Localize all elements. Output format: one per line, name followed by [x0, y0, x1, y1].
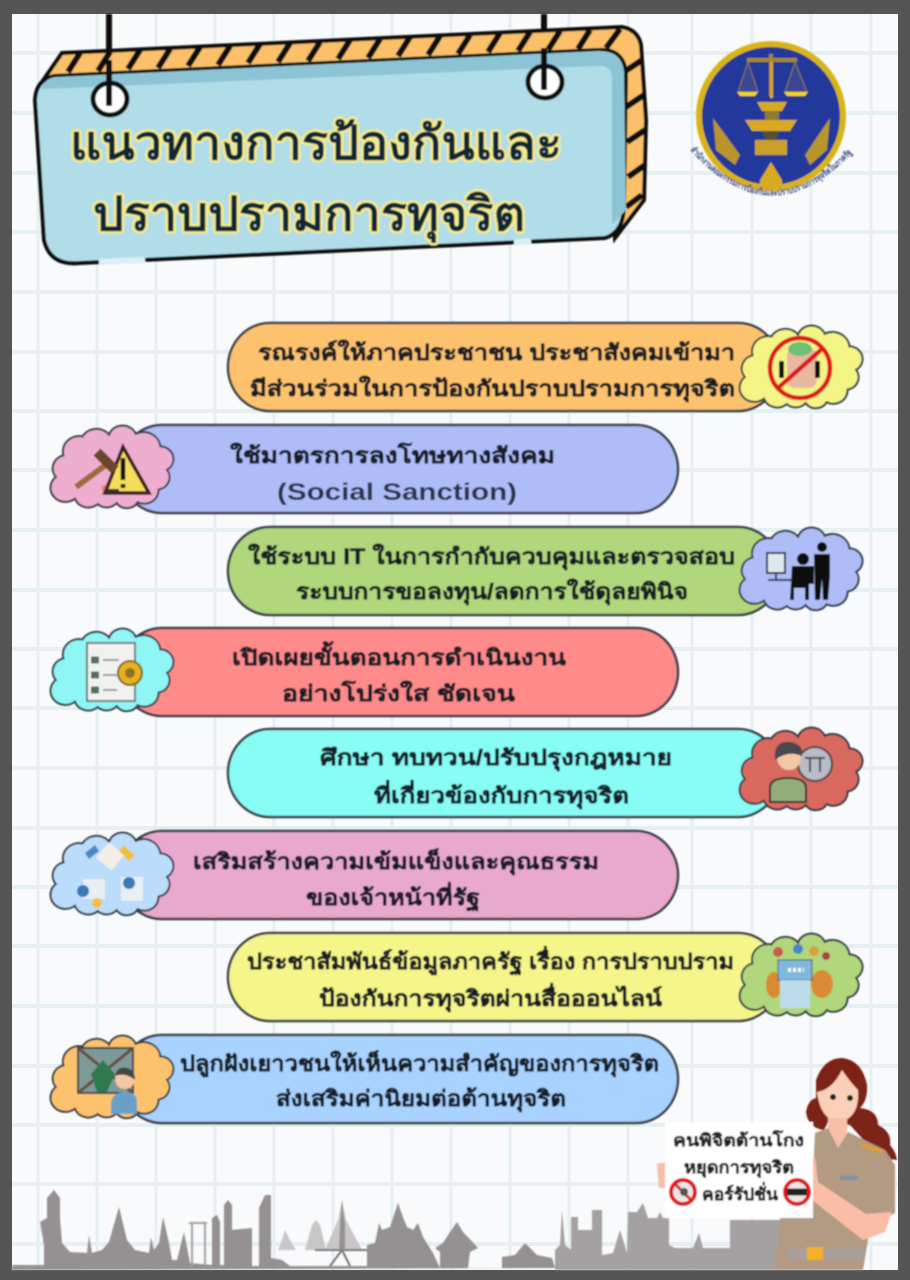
pill: [120, 831, 678, 919]
sign face: [35, 50, 626, 263]
item 2: social sanction: (Social Sanction): [277, 479, 517, 506]
face: [817, 1070, 858, 1123]
neck: [828, 1118, 847, 1148]
anti-corruption placard: คอร์รัปชั่น: [702, 1182, 778, 1204]
cloud icon: teaching youth: [51, 1036, 174, 1118]
item 5: review laws: [228, 728, 863, 817]
text: ปลูกฝังเยาวชนให้เห็นความสำคัญของการทุจริต: [180, 1049, 659, 1078]
item 3: IT systems: ระบบการขอลงทุน/ลดการใช้ดุลยพินิจ: [296, 578, 688, 606]
hand left: [657, 1162, 670, 1188]
belt: [787, 1248, 863, 1260]
no-entry icon left: [671, 1180, 695, 1204]
item 7: public relations: ป้องกันการทุจริตผ่านสื่อออนไลน์: [319, 982, 662, 1013]
item 1: public participation: [228, 323, 863, 411]
cloud icon: certificate: [51, 629, 174, 711]
logo emblem: [690, 40, 854, 197]
placard text: คนพิจิตต้านโกง: [673, 1130, 804, 1150]
cloud icon: lawyer: [740, 728, 863, 810]
item 4: transparent procedures: อย่างโปร่งใส ชัดเจน: [282, 680, 515, 706]
item 5: review laws: ที่เกี่ยวข้องกับการทุจริต: [374, 779, 629, 810]
title text: ปราบปรามการทุจริต: [93, 187, 525, 243]
cloud icon: online media: [740, 934, 863, 1016]
text: เปิดเผยขั้นตอนการดำเนินงาน: [232, 641, 566, 670]
pill: [120, 628, 678, 716]
anti-corruption placard: หยุดการทุจริต: [684, 1158, 794, 1178]
text: รณรงค์ให้ภาคประชาชน ประชาสังคมเข้ามา: [258, 339, 735, 365]
logo caption: [690, 150, 853, 196]
cloud icon: gavel warning: [51, 426, 174, 508]
item 6: officials integrity: [51, 831, 678, 919]
logo emblem: สำนักงานคณะกรรมการป้องกันและปราบปรามการทุจริตในภาครัฐ: [690, 146, 854, 197]
item 1: public participation: มีส่วนร่วมในการป้องกันปราบปรามการทุจริต: [250, 375, 735, 403]
ring left: [93, 83, 127, 115]
hair: [806, 1058, 897, 1160]
anti-corruption placard: [665, 1122, 813, 1218]
pill: [120, 425, 678, 513]
sign hazard stripe edge: [42, 27, 646, 238]
cloud icon: teamwork: [51, 833, 174, 915]
sign hazard stripes: [68, 29, 645, 207]
pill: [228, 527, 780, 615]
item 4: transparent procedures: [51, 628, 678, 716]
text: ใช้มาตรการลงโทษทางสังคม: [230, 442, 555, 468]
pill: [228, 729, 780, 817]
item 6: officials integrity: ของเจ้าหน้าที่รัฐ: [306, 881, 480, 912]
item 8: youth values: [51, 1035, 678, 1123]
cloud icon: no corruption: [740, 326, 863, 408]
title text: [70, 116, 562, 243]
title sign: [35, 27, 646, 263]
woman holding sign: [775, 1058, 897, 1270]
arm: [803, 1157, 892, 1240]
text: ศึกษา ทบทวน/ปรับปรุงกฎหมาย: [320, 745, 672, 772]
hanging strings: [109, 14, 544, 62]
text: ประชาสัมพันธ์ข้อมูลภาครัฐ เรื่อง การปราบปราม: [247, 945, 734, 976]
pill: [228, 323, 780, 411]
text: ใช้ระบบ IT ในการกำกับควบคุมและตรวจสอบ: [248, 543, 735, 571]
pill: [228, 933, 780, 1021]
title text: แนวทางการป้องกันและ: [70, 116, 562, 169]
pill: [120, 1035, 678, 1123]
no-entry icon right: [785, 1180, 809, 1204]
item 2: social sanction: [51, 425, 678, 513]
skyline silhouette: [12, 1190, 785, 1270]
item 8: youth values: ส่งเสริมค่านิยมต่อต้านทุจริต: [276, 1086, 566, 1113]
ring right: [528, 66, 562, 98]
text: เสริมสร้างความเข้มแข็งและคุณธรรม: [193, 847, 599, 876]
uniform: [775, 1128, 895, 1270]
cloud icon: people at computer: [740, 528, 863, 610]
item 7: public relations: [228, 933, 863, 1021]
item 3: IT systems: [228, 527, 863, 615]
